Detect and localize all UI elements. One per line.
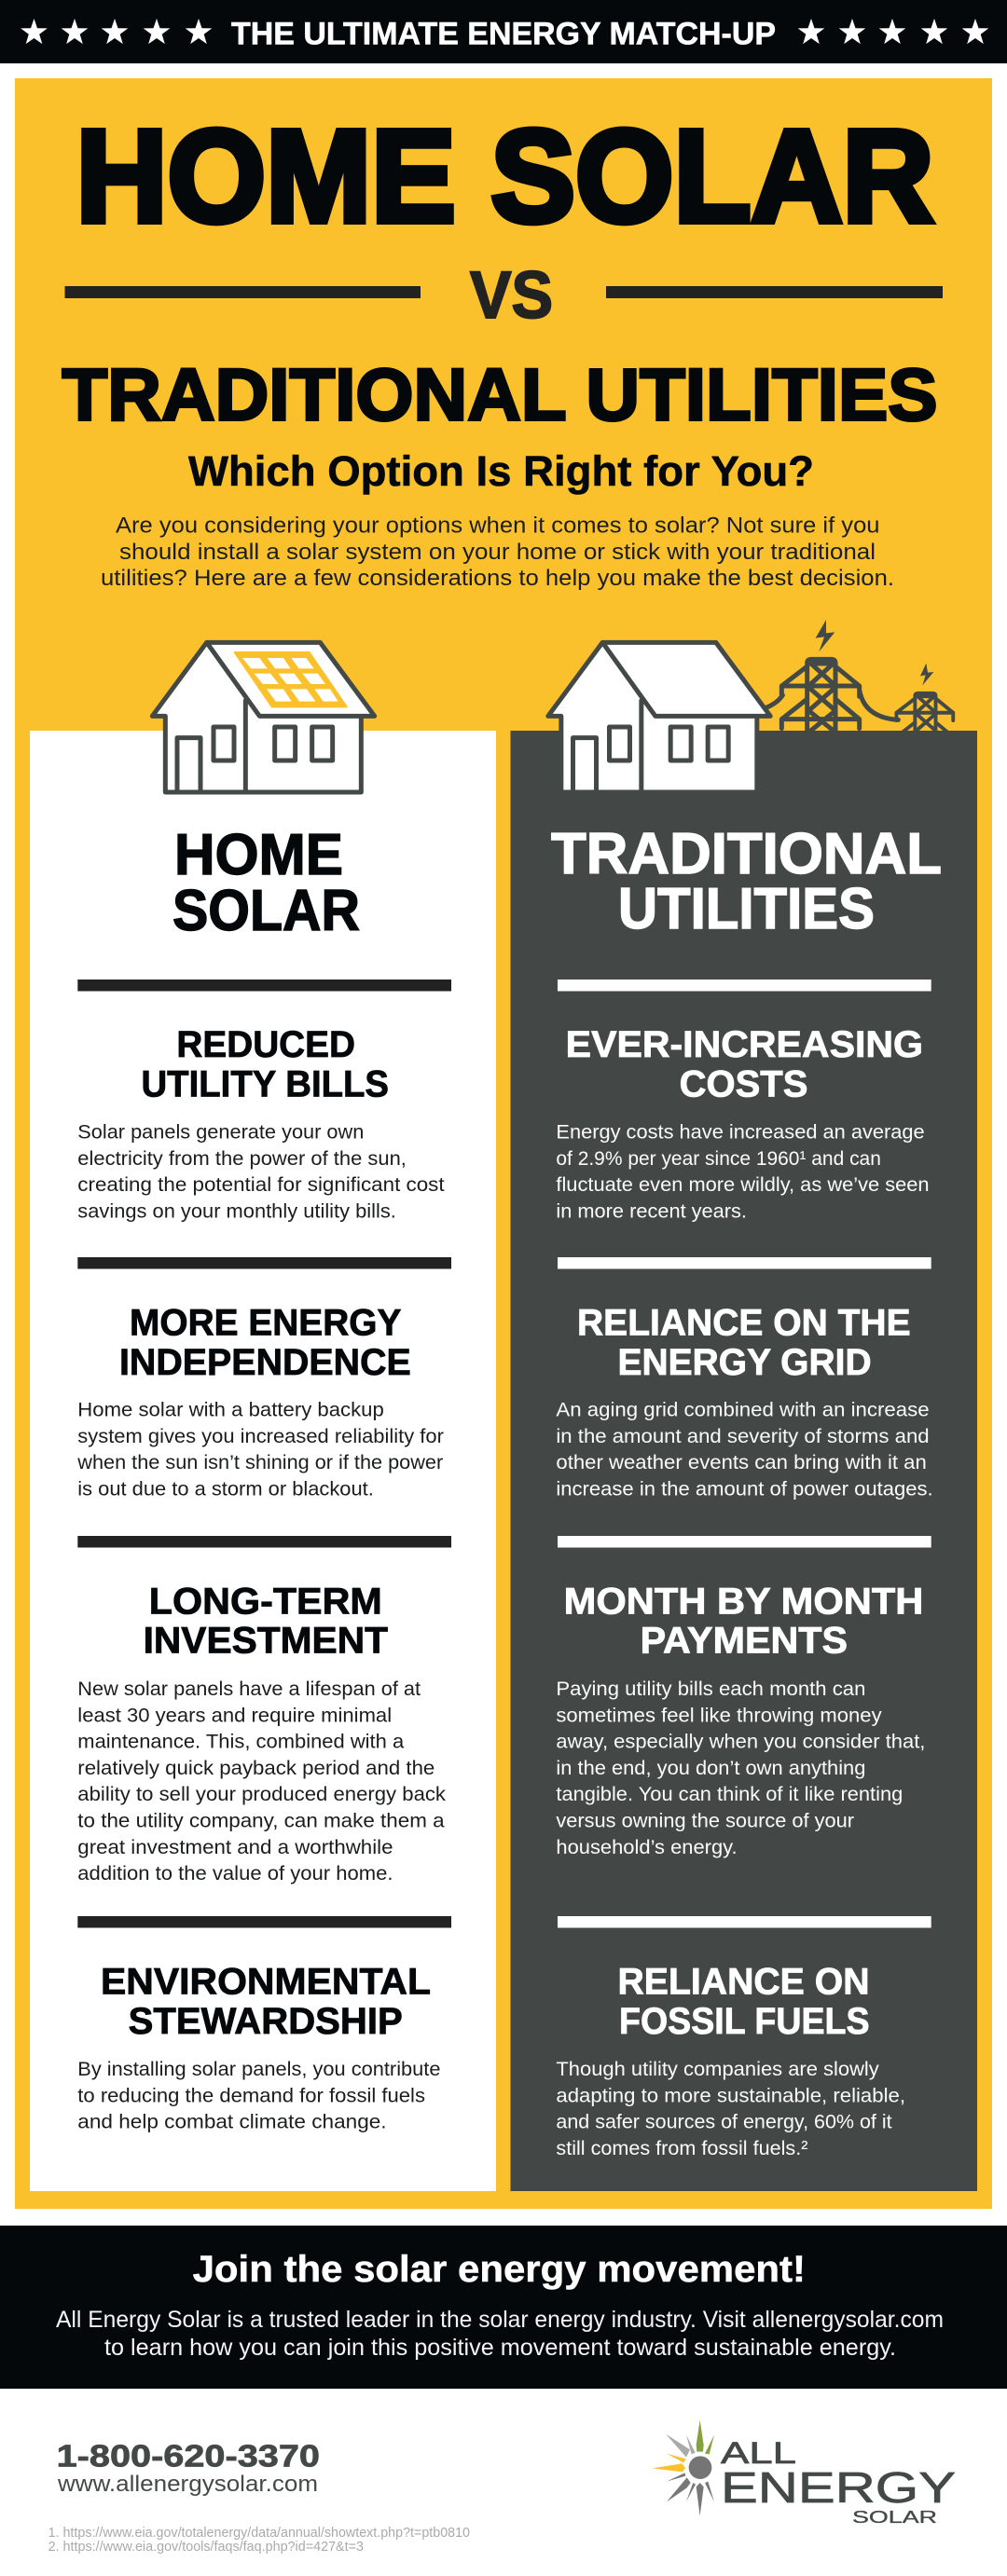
- item: reliance on the energy grid: increase in the amount of power outages.: [556, 1478, 933, 1500]
- subtitle: traditional utilities: TRADITIONAL UTILITIES: [62, 354, 937, 436]
- column heading: SOLAR: [172, 879, 360, 943]
- icon: traditional house: [548, 642, 770, 792]
- item: reliance on fossil fuels: adapting to more sustainable, reliable,: [556, 2085, 905, 2106]
- item: more energy independence: when the sun isn’t shining or if the power: [76, 1452, 443, 1473]
- stars left: [21, 19, 212, 44]
- item: month by month payments: tangible. You can think of it like renting: [556, 1784, 903, 1805]
- logo wordmark: ENERGY: [721, 2463, 956, 2512]
- intro paragraph: Are you considering your options when it comes to solar? Not sure if you: [116, 513, 880, 539]
- item: month by month payments: PAYMENTS: [641, 1620, 848, 1661]
- item: long-term investment: to the utility company, can make them a: [77, 1810, 445, 1832]
- item: reduced utility bills: Solar panels generate your own: [77, 1122, 364, 1143]
- item: long-term investment: great investment and a worthwhile: [77, 1837, 393, 1858]
- item: month by month payments: versus owning the source of your: [556, 1810, 854, 1832]
- footnotes: 1. https://www.eia.gov/totalenergy/data/annual/showtext.php?t=ptb0810: [48, 2525, 470, 2541]
- item: environmental stewardship: and help combat climate change.: [77, 2112, 387, 2133]
- item: more energy independence: MORE ENERGY: [130, 1303, 401, 1344]
- footnotes: 2. https://www.eia.gov/tools/faqs/faq.php?id=427&t=3: [48, 2539, 364, 2555]
- item: more energy independence: system gives you increased reliability for: [77, 1426, 444, 1447]
- panel: traditional utilities: [511, 620, 977, 2191]
- item: month by month payments: sometimes feel like throwing money: [556, 1705, 882, 1726]
- column heading: [172, 823, 360, 943]
- cta heading: Join the solar energy movement!: [193, 2249, 806, 2290]
- logo sunburst: [652, 2420, 714, 2515]
- icon: house with solar panels: [152, 642, 375, 792]
- item: long-term investment: maintenance. This, combined with a: [77, 1732, 405, 1753]
- item: reduced utility bills: creating the potential for significant cost: [77, 1174, 445, 1196]
- call to action band: [0, 2226, 1007, 2389]
- item: month by month payments: Paying utility bills each month can: [556, 1679, 865, 1700]
- item: long-term investment: addition to the value of your home.: [77, 1863, 393, 1884]
- item: long-term investment: [77, 1536, 451, 1884]
- vs divider: [65, 259, 943, 333]
- item: reliance on the energy grid: ENERGY GRID: [617, 1342, 872, 1383]
- column heading: HOME: [174, 823, 343, 887]
- item: ever-increasing costs: [556, 980, 931, 1222]
- cta paragraph: All Energy Solar is a trusted leader in the solar energy industry. Visit allenergysolar.com: [56, 2307, 944, 2333]
- item: month by month payments: away, especially when you consider that,: [556, 1732, 925, 1753]
- top banner: [0, 0, 1007, 63]
- solar panel array: [235, 652, 347, 706]
- item: more energy independence: INDEPENDENCE: [119, 1342, 411, 1383]
- cta paragraph: to learn how you can join this positive movement toward sustainable energy.: [104, 2335, 896, 2361]
- contact details: [57, 2439, 320, 2497]
- column heading: TRADITIONAL: [551, 822, 942, 886]
- item: long-term investment: LONG-TERM: [149, 1581, 382, 1622]
- logo wordmark: SOLAR: [852, 2508, 937, 2527]
- item: reliance on fossil fuels: FOSSIL FUELS: [619, 2001, 869, 2042]
- item: reliance on the energy grid: in the amount and severity of storms and: [556, 1426, 930, 1447]
- item: reliance on fossil fuels: still comes from fossil fuels.²: [556, 2138, 807, 2159]
- item: reduced utility bills: electricity from the power of the sun,: [77, 1148, 407, 1170]
- contact details: 1-800-620-3370: [57, 2439, 320, 2473]
- item: reduced utility bills: REDUCED: [176, 1024, 355, 1065]
- item: reliance on fossil fuels: and safer sources of energy, 60% of it: [556, 2112, 892, 2133]
- icon: power pylons: [765, 620, 953, 747]
- item: reduced utility bills: UTILITY BILLS: [142, 1064, 389, 1105]
- item: reliance on the energy grid: [556, 1257, 933, 1500]
- item: environmental stewardship: STEWARDSHIP: [129, 2001, 403, 2042]
- item: ever-increasing costs: of 2.9% per year since 1960¹ and can: [556, 1148, 881, 1170]
- item: more energy independence: [76, 1257, 451, 1500]
- item: environmental stewardship: By installing solar panels, you contribute: [77, 2059, 441, 2080]
- item: reliance on the energy grid: RELIANCE ON THE: [577, 1303, 911, 1344]
- item: long-term investment: New solar panels have a lifespan of at: [77, 1679, 421, 1700]
- item: reliance on fossil fuels: [556, 1916, 931, 2159]
- intro paragraph: utilities? Here are a few considerations to help you make the best decision.: [101, 566, 894, 591]
- item: environmental stewardship: to reducing the demand for fossil fuels: [77, 2085, 425, 2106]
- item: reliance on the energy grid: An aging grid combined with an increase: [556, 1400, 930, 1420]
- large pylon: [765, 620, 898, 732]
- item: reduced utility bills: [77, 980, 451, 1222]
- item: long-term investment: relatively quick payback period and the: [77, 1758, 435, 1779]
- banner title: THE ULTIMATE ENERGY MATCH-UP: [231, 17, 776, 52]
- item: ever-increasing costs: fluctuate even more wildly, as we’ve seen: [556, 1174, 930, 1196]
- item: environmental stewardship: [77, 1916, 451, 2133]
- item: long-term investment: ability to sell your produced energy back: [77, 1784, 447, 1805]
- item: reliance on the energy grid: other weather events can bring with it an: [556, 1452, 927, 1473]
- item: long-term investment: least 30 years and require minimal: [77, 1705, 392, 1726]
- item: more energy independence: Home solar with a battery backup: [77, 1400, 384, 1420]
- intro paragraph: [101, 513, 894, 591]
- footnotes: [48, 2525, 470, 2555]
- item: reliance on fossil fuels: RELIANCE ON: [617, 1961, 869, 2002]
- item: environmental stewardship: ENVIRONMENTAL: [101, 1961, 431, 2002]
- stars right: [798, 19, 988, 44]
- question heading: Which Option Is Right for You?: [188, 447, 814, 495]
- logo: all energy solar: [652, 2420, 956, 2527]
- item: reliance on fossil fuels: Though utility companies are slowly: [556, 2059, 879, 2080]
- column heading: UTILITIES: [618, 877, 875, 941]
- intro paragraph: should install a solar system on your home or stick with your traditional: [119, 540, 876, 565]
- item: month by month payments: household’s energy.: [556, 1837, 738, 1858]
- vs label: VS: [470, 259, 553, 333]
- panel: home solar: [30, 642, 496, 2191]
- item: month by month payments: [556, 1536, 931, 1858]
- small pylon: [896, 693, 953, 747]
- main title: home solar: HOME SOLAR: [76, 103, 934, 250]
- item: ever-increasing costs: in more recent years.: [556, 1200, 747, 1222]
- contact details: www.allenergysolar.com: [57, 2472, 318, 2497]
- item: ever-increasing costs: EVER-INCREASING: [566, 1024, 923, 1065]
- item: ever-increasing costs: COSTS: [680, 1064, 807, 1105]
- column heading: [551, 822, 942, 941]
- logo wordmark: ALL: [721, 2436, 796, 2470]
- item: long-term investment: INVESTMENT: [144, 1620, 388, 1661]
- item: more energy independence: is out due to a storm or blackout.: [77, 1478, 374, 1500]
- item: month by month payments: in the end, you don’t own anything: [556, 1758, 865, 1779]
- cta paragraph: [56, 2307, 944, 2361]
- logo wordmark: [721, 2436, 956, 2527]
- item: ever-increasing costs: Energy costs have increased an average: [556, 1122, 925, 1143]
- item: month by month payments: MONTH BY MONTH: [564, 1581, 923, 1622]
- item: reduced utility bills: savings on your monthly utility bills.: [77, 1200, 396, 1222]
